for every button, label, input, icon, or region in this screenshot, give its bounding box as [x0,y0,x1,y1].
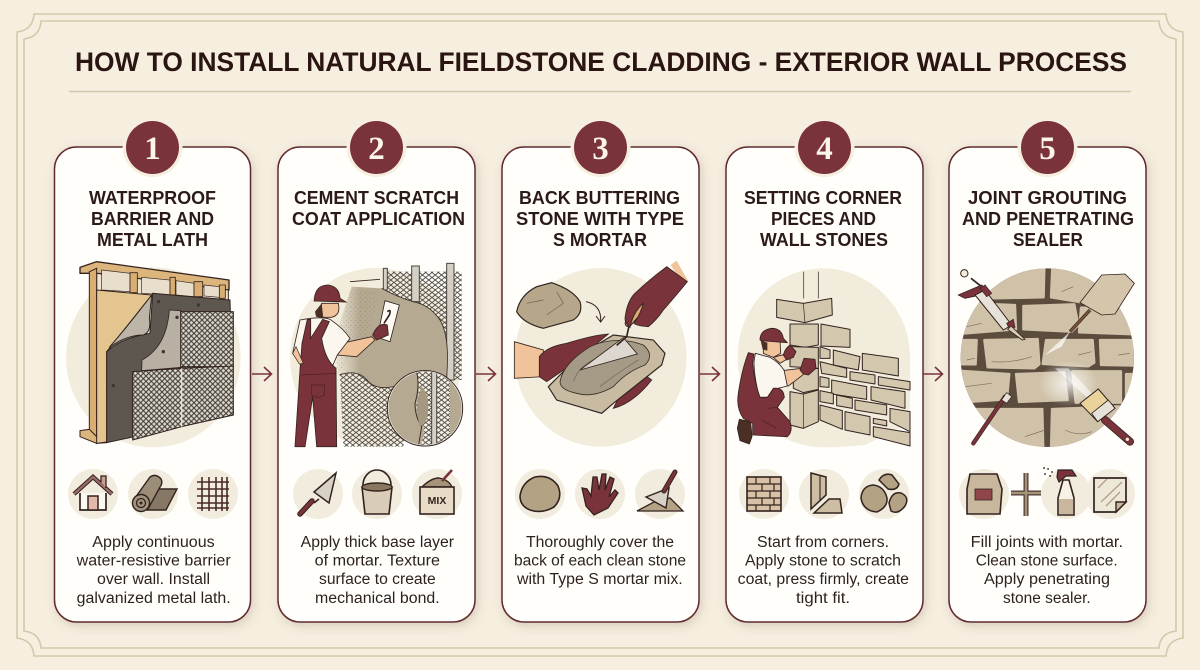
panel: step 4 [726,117,923,622]
card 4 [726,147,923,622]
left arm [514,342,543,378]
heading 2: CEMENT SCRATCH [294,188,459,208]
heading 2 [292,188,465,229]
supporting icons 5 [959,468,1135,519]
description 1: water-resistive barrier [76,552,231,570]
illustration: worker applying scratch coat [290,263,463,447]
inset detail circle [387,370,463,447]
heading 3: STONE WITH TYPE [516,209,684,229]
illustration: grouted stone and tools [958,267,1138,450]
description 5: Apply penetrating [984,571,1110,588]
description 4: coat, press firmly, create [738,571,909,588]
heading 4 [744,188,902,250]
icon: mix bag: MIX [428,495,446,507]
heading 1 [89,188,216,250]
heading 4: PIECES AND [771,209,876,229]
heading 3: BACK BUTTERING [519,188,680,208]
heading 1: WATERPROOF [89,188,216,208]
step number 1: 1 [144,131,161,167]
description 4: Apply stone to scratch [745,552,901,570]
step number 3 [570,117,630,177]
icon: corner stone [799,469,849,519]
title: HOW TO INSTALL NATURAL FIELDSTONE CLADDING - EXTERIOR WALL PROCESS [75,47,1127,77]
description 2: of mortar. Texture [315,552,440,570]
icon: house [68,469,118,519]
sponge / spray nozzle [1080,274,1134,315]
step number 5: 5 [1039,131,1056,167]
panel: step 1 [54,117,250,622]
pointing brush [973,397,1005,443]
step number 3: 3 [592,131,609,167]
heading 4: SETTING CORNER [744,188,902,208]
panel: step 5 [949,117,1146,622]
icon: grid mesh [188,469,238,519]
description 1 [76,534,231,607]
description 2: surface to create [319,571,436,588]
arrow 3 to 4 [700,367,720,381]
card 2 [278,147,475,622]
trowel [580,338,637,370]
icon: mix bag [412,469,462,519]
stone slab [548,335,665,413]
caulk gun [971,278,987,291]
heading 3: S MORTAR [553,230,647,250]
worker kneeling [737,328,816,444]
description 1: over wall. Install [97,571,210,588]
icon: mortar bag [959,469,1009,519]
heading 2: COAT APPLICATION [292,209,465,229]
paint brush [1105,420,1130,442]
heading 1: BARRIER AND [91,209,214,229]
step number 1 [122,117,182,177]
heading 4: WALL STONES [760,230,888,250]
illustration: wall layers with lath [66,262,241,447]
description 5: Fill joints with mortar. [971,534,1123,551]
description 4: tight fit. [796,590,850,607]
step number 2: 2 [368,131,385,167]
icon: trowel on mortar [635,469,685,519]
description 3: back of each clean stone [514,552,686,570]
supporting icons 2 [293,469,462,519]
icon: spray bottle [1041,468,1091,519]
card 3 [502,147,699,622]
description 3: Thoroughly cover the [526,534,674,551]
icon: stone [515,469,565,519]
icon: stones [859,469,909,519]
stone [517,283,581,328]
description 5: stone sealer. [1003,590,1091,607]
arrow 4 to 5 [923,367,942,381]
supporting icons 3 [515,469,685,519]
description 1: galvanized metal lath. [77,590,231,607]
supporting icons 4 [739,469,909,519]
description 5 [971,534,1123,607]
right hand [671,261,688,285]
illustration: buttering stone [514,261,688,447]
heading 1: METAL LATH [97,230,208,250]
heading 5: SEALER [1013,230,1083,250]
card 5 [949,147,1146,622]
step number 5 [1018,117,1078,177]
heading 5: JOINT GROUTING [968,188,1127,208]
panel: step 2 [278,117,475,622]
description 2: mechanical bond. [315,590,440,607]
icon: bucket [352,469,402,519]
icon: joint cross [1011,473,1041,516]
description 3: with Type S mortar mix. [516,571,683,588]
icon: sealed stone tile [1085,469,1135,519]
description 4: Start from corners. [757,534,889,551]
step number 4: 4 [816,131,833,167]
icon: glove [575,469,625,519]
panel: step 3 [502,117,699,622]
description 2: Apply thick base layer [301,534,454,551]
illustration: setting stones [737,268,910,447]
worker [337,337,375,357]
step number 4 [794,117,854,177]
spray glow [1038,360,1098,407]
icon: trowel [293,469,343,519]
supporting icons 1 [68,469,238,519]
heading 5 [962,188,1134,250]
arrow 2 to 3 [476,367,496,381]
description 4 [738,534,909,607]
heading 5: AND PENETRATING [962,209,1134,229]
icon: roll [128,469,178,519]
description 1: Apply continuous [92,534,215,551]
heading 3 [516,188,684,250]
description 5: Clean stone surface. [976,552,1118,570]
icon: brick wall [739,469,789,519]
card 1 [54,147,250,622]
step number 2 [346,117,406,177]
description 2 [301,534,454,607]
arrow 1 to 2 [252,367,272,381]
description 3 [514,534,686,588]
